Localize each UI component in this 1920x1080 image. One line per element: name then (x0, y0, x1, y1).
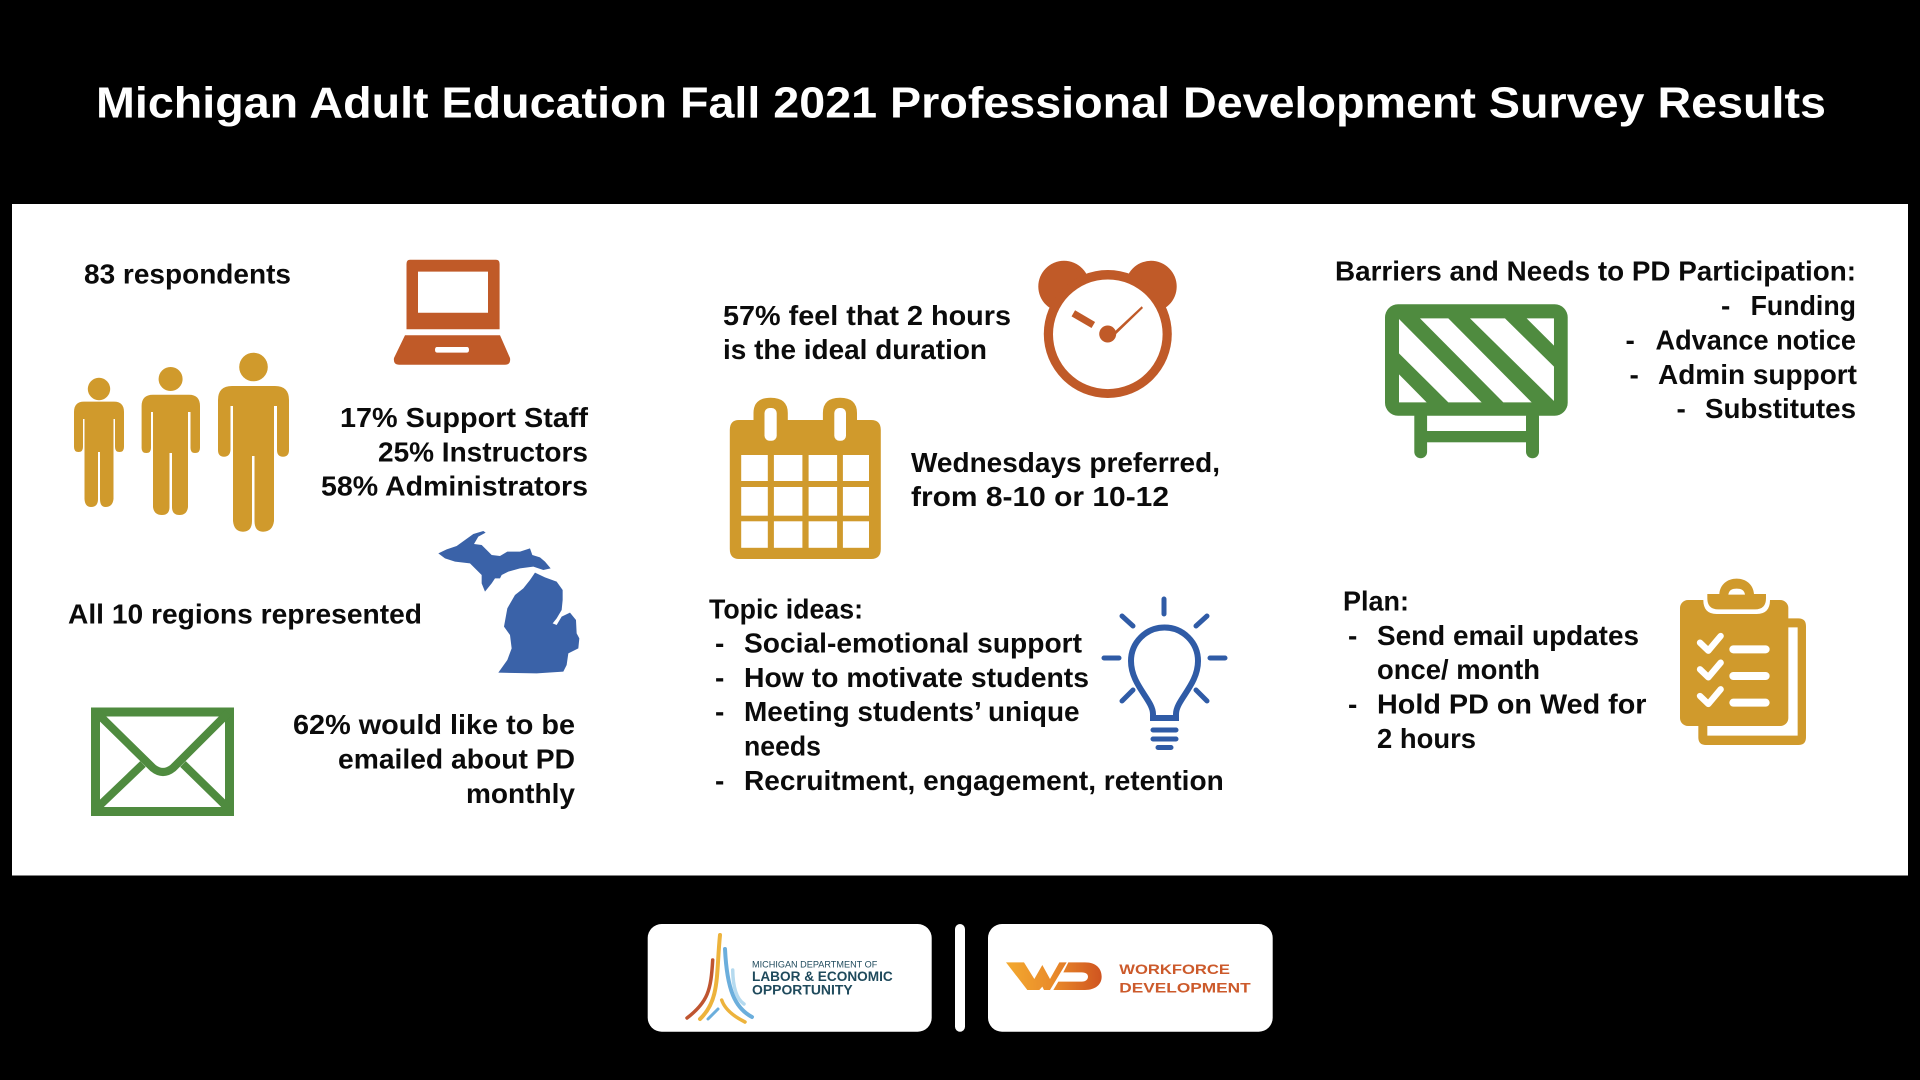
logo text: LEO: OPPORTUNITY (752, 982, 853, 997)
icon: road barrier (1385, 304, 1568, 458)
text: barriers list: - (1626, 325, 1635, 356)
title: Michigan Adult Education Fall 2021 Professional Development Survey Results (96, 78, 1826, 128)
text: barriers list: Admin support (1658, 359, 1857, 390)
text: topic ideas list: - (715, 662, 724, 693)
logo text: LEO: LABOR & ECONOMIC (752, 969, 893, 984)
text: barriers list: Advance notice (1656, 325, 1856, 356)
logo text: Workforce Development (1119, 961, 1251, 996)
icon: alarm clock (1038, 261, 1177, 398)
logo text: Workforce Development: WORKFORCE (1119, 961, 1230, 977)
footer logo card: Workforce Development (988, 924, 1273, 1032)
text: barriers list: - (1721, 290, 1730, 321)
person medium (142, 367, 200, 515)
text: plan list: Send email updates (1377, 620, 1639, 651)
text: ideal duration (723, 300, 1011, 365)
icon: light bulb (1104, 599, 1225, 748)
icon: envelope (96, 712, 230, 812)
text: email preference: 62% would like to be (293, 709, 575, 740)
text: plan list: Hold PD on Wed for (1377, 688, 1647, 719)
white content panel (12, 204, 1908, 876)
text: topic ideas list: How to motivate students (744, 662, 1089, 693)
text: topic ideas list: Meeting students’ unique (744, 696, 1080, 727)
text: barriers list: Funding (1751, 290, 1856, 321)
text: topic ideas list: Recruitment, engagement, retention (744, 765, 1224, 796)
text: topic ideas list: - (715, 628, 724, 659)
text: regions: All 10 regions represented (68, 599, 422, 630)
text: plan list: once/ month (1377, 654, 1540, 685)
text: topic ideas list: - (715, 696, 724, 727)
text: plan list (1343, 586, 1647, 754)
icon: clipboard checklist (1680, 579, 1806, 745)
text: barriers list: - (1630, 359, 1639, 390)
logo text: Workforce Development: DEVELOPMENT (1119, 980, 1251, 996)
text: email preference (293, 709, 575, 809)
footer divider (955, 924, 965, 1032)
text: plan list: - (1348, 620, 1357, 651)
footer logo card: Michigan LEO (648, 924, 932, 1032)
text: topic ideas list: Topic ideas: (709, 594, 863, 624)
text: staff breakdown: 25% Instructors (378, 436, 588, 468)
text: plan list: Plan: (1343, 586, 1409, 617)
text: preferred day and time (911, 447, 1220, 512)
text: staff breakdown (321, 402, 589, 502)
person small (74, 378, 124, 507)
text: barriers list (1626, 290, 1857, 424)
text: barriers list: Substitutes (1705, 393, 1856, 424)
text: topic ideas list: - (715, 765, 724, 796)
text: respondent count: 83 respondents (84, 259, 291, 290)
icon: three people (74, 353, 289, 532)
person large (218, 353, 289, 532)
panel: respondents column (68, 259, 589, 812)
panel: scheduling and topics column (709, 261, 1225, 796)
text: email preference: emailed about PD (338, 744, 575, 774)
text: email preference: monthly (466, 778, 575, 809)
icon: calendar (730, 398, 881, 559)
logo text: LEO (752, 960, 893, 997)
logo mark: LEO strokes (687, 935, 752, 1022)
text: topic ideas list (709, 594, 1224, 796)
text: plan list: 2 hours (1377, 723, 1476, 754)
text: topic ideas list: Social-emotional support (744, 628, 1082, 659)
text: preferred day and time: Wednesdays preferred, (911, 447, 1220, 478)
text: ideal duration: is the ideal duration (723, 334, 987, 365)
text: topic ideas list: needs (744, 730, 821, 762)
icon: laptop (394, 260, 510, 365)
text: staff breakdown: 17% Support Staff (340, 402, 589, 433)
text: barriers list: - (1676, 393, 1686, 424)
text: barriers heading: Barriers and Needs to PD Participation: (1335, 256, 1856, 287)
text: staff breakdown: 58% Administrators (321, 471, 588, 502)
panel: barriers and plan column (1335, 256, 1857, 754)
text: plan list: - (1348, 688, 1357, 719)
logo mark: WD (1006, 962, 1102, 990)
text: ideal duration: 57% feel that 2 hours (723, 300, 1011, 331)
icon: Michigan map (438, 531, 579, 673)
text: preferred day and time: from 8-10 or 10-12 (911, 481, 1169, 512)
logo text: LEO: MICHIGAN DEPARTMENT OF (752, 960, 878, 970)
